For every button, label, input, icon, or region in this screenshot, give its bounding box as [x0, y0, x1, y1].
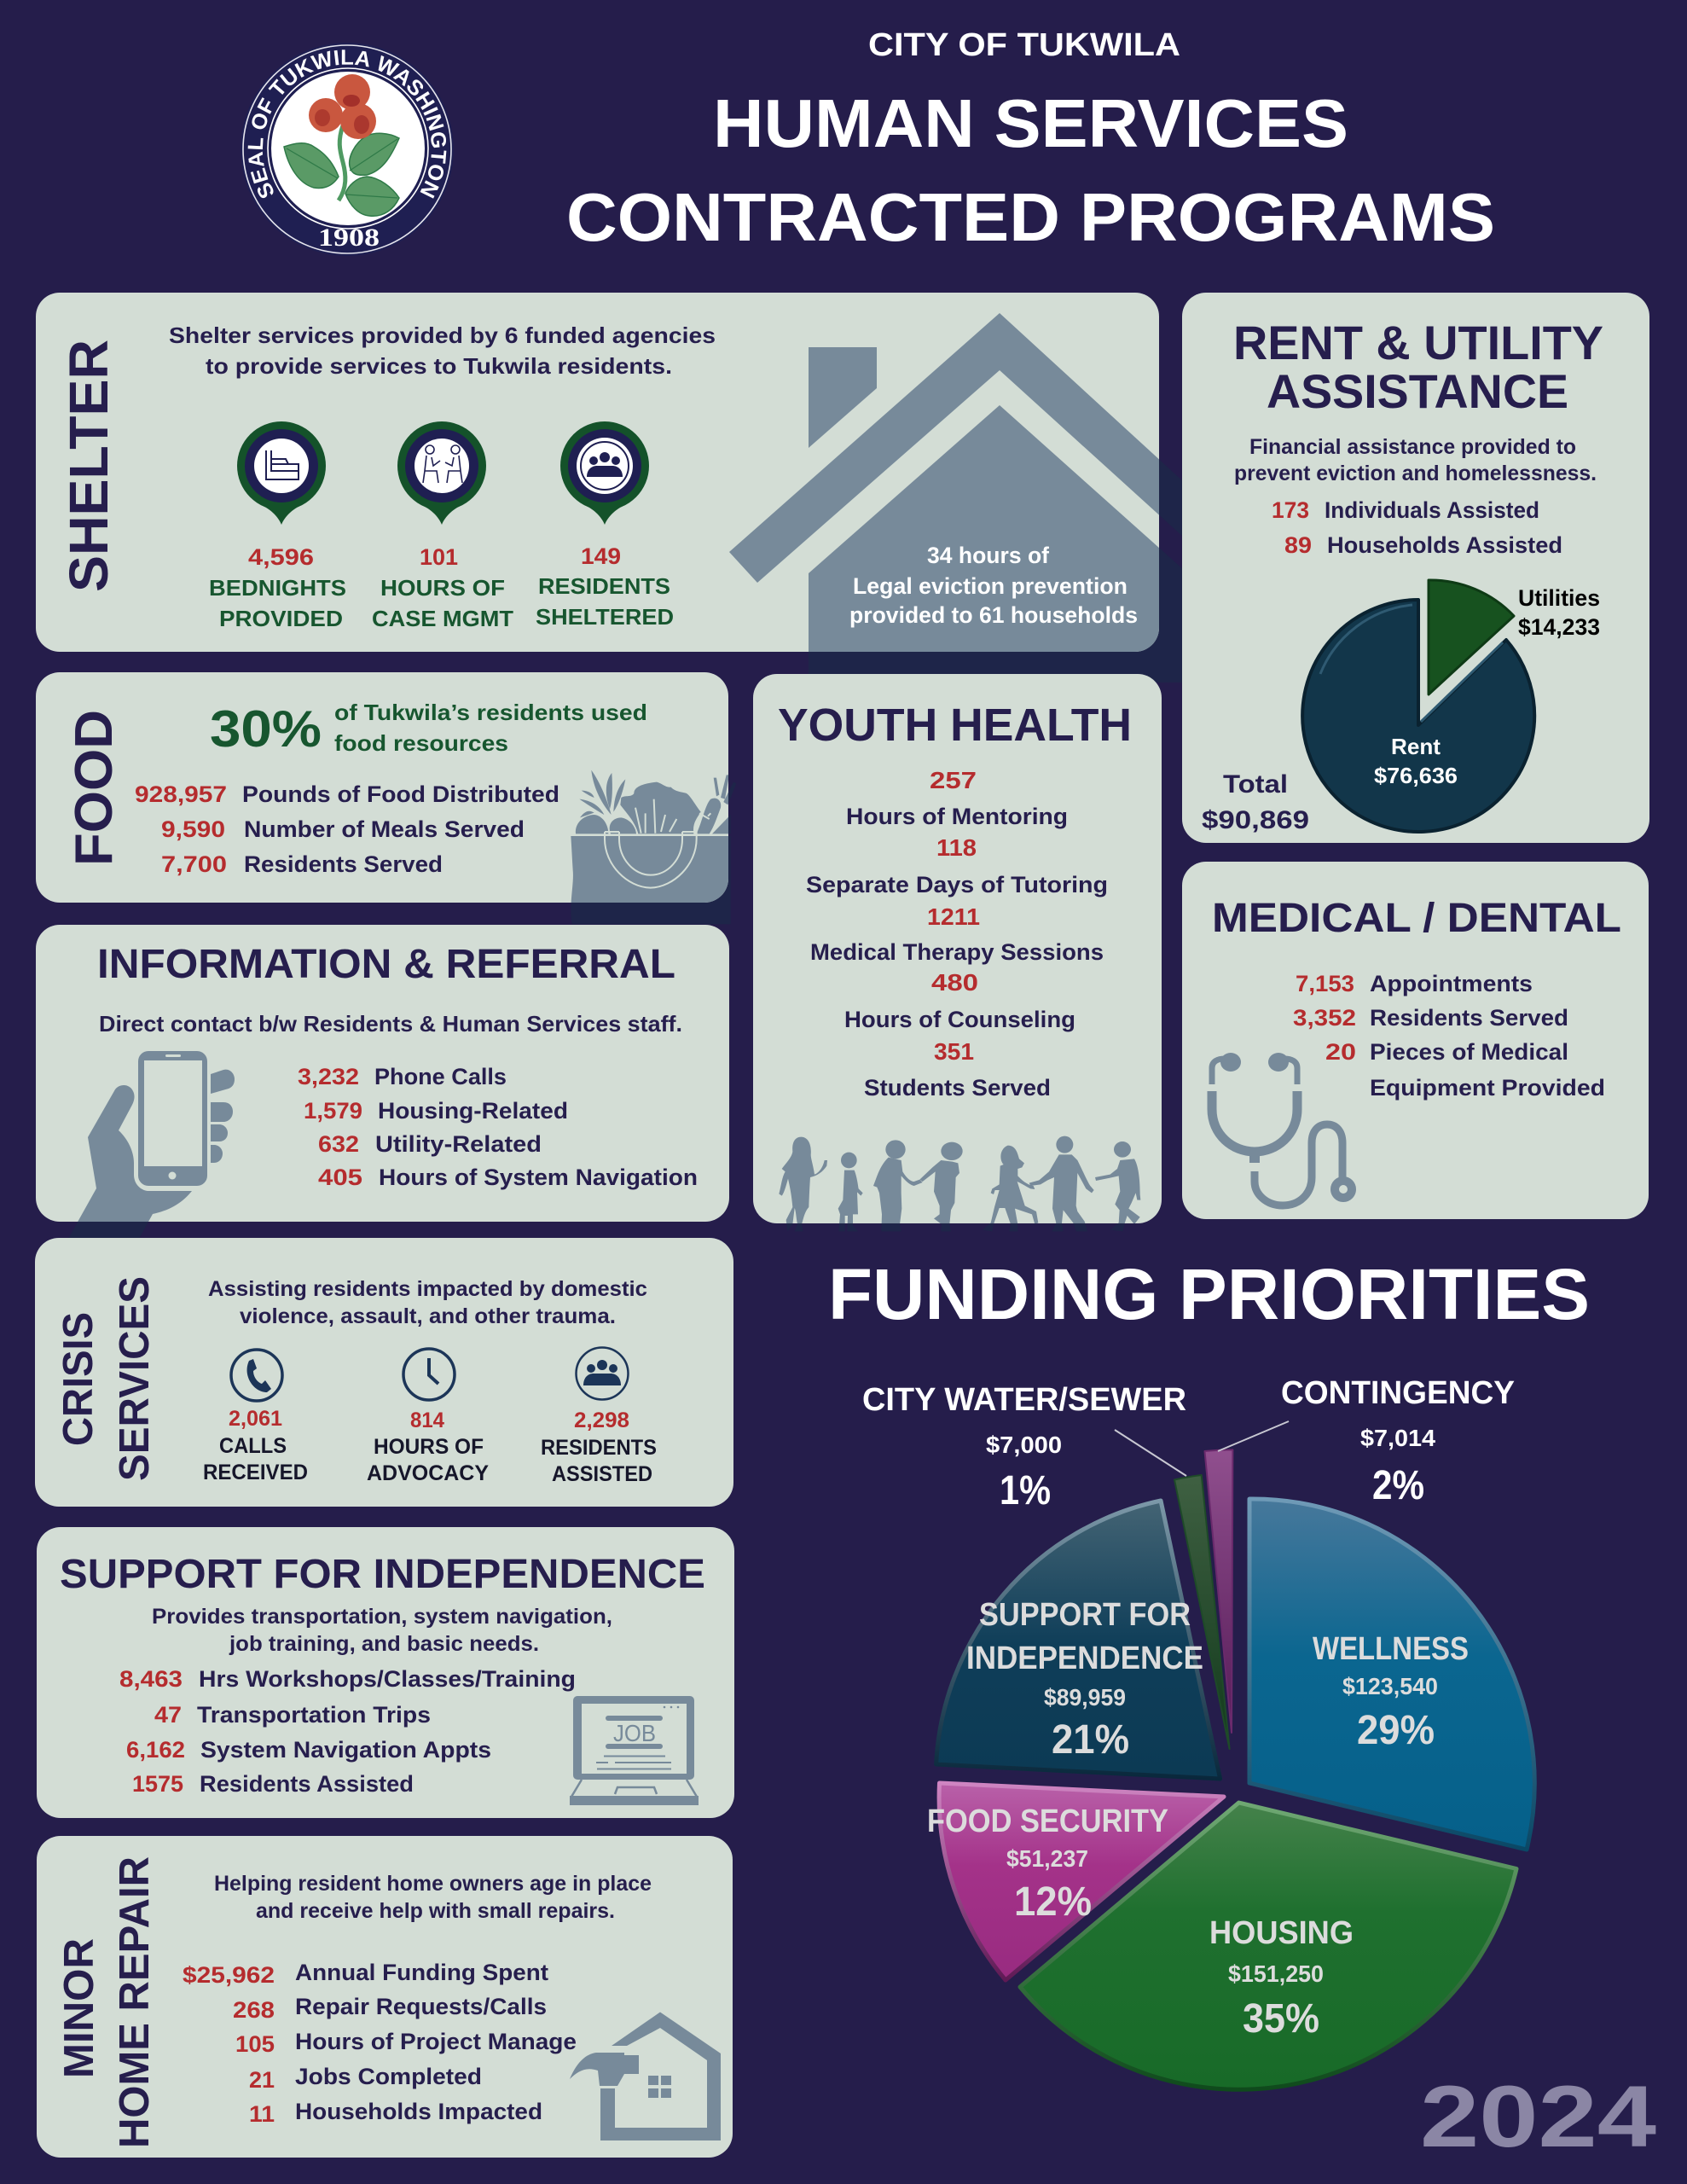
title: CONTRACTED PROGRAMS	[566, 179, 1495, 255]
label: wellness	[1313, 1631, 1469, 1753]
youth stats: 480	[931, 969, 978, 996]
stat: case management	[372, 544, 513, 631]
medical stats	[1293, 971, 1605, 1101]
panel: minor home repair	[37, 1836, 733, 2158]
panel: medical and dental	[1182, 862, 1649, 1219]
icon: laptop job listing: JOB	[613, 1720, 656, 1746]
youth stats: Hours of Counseling	[844, 1007, 1075, 1032]
slice: housing	[1020, 1803, 1516, 2089]
info stats: 3,232	[298, 1064, 359, 1089]
repair stats: $25,962	[183, 1962, 275, 1988]
icon: clock	[403, 1349, 455, 1400]
youth stats: 257	[930, 767, 977, 793]
info stats	[298, 1064, 698, 1190]
label: wellness: WELLNESS	[1313, 1631, 1469, 1667]
icon: hand holding phone	[78, 1051, 235, 1222]
repair stats: 11	[249, 2101, 275, 2127]
heading: rent and utility: ASSISTANCE	[1267, 364, 1568, 418]
stat: calls received	[203, 1407, 308, 1484]
label: food security	[927, 1804, 1168, 1925]
seal of Tukwila: 1908	[318, 224, 380, 252]
food stats: 7,700	[161, 851, 227, 877]
label: food security: 12%	[1014, 1879, 1092, 1925]
support stats	[119, 1666, 576, 1797]
stat: case management: 101	[420, 544, 458, 570]
label: food security: $51,237	[1006, 1845, 1088, 1872]
legal eviction note	[849, 543, 1138, 628]
rent description: prevent eviction and homelessness.	[1234, 462, 1597, 485]
icon: phone	[231, 1350, 282, 1401]
label: housing: $151,250	[1228, 1960, 1324, 1987]
repair description	[214, 1872, 652, 1923]
shelter description: to provide services to Tukwila residents.	[206, 353, 672, 379]
crisis description	[208, 1277, 647, 1328]
slice: wellness	[1249, 1499, 1534, 1850]
medical stats: 3,352	[1293, 1005, 1356, 1031]
stat: bednights	[209, 544, 346, 631]
support stats: 47	[154, 1702, 182, 1728]
slice: support for independence	[936, 1501, 1220, 1779]
food stats	[135, 781, 559, 877]
repair stats: Hours of Project Manage	[295, 2029, 577, 2054]
legal eviction note: 34 hours of	[927, 543, 1050, 568]
food stats: Number of Meals Served	[244, 816, 525, 842]
info description: Direct contact b/w Residents & Human Services staff.	[99, 1011, 682, 1037]
label: contingency: 2%	[1372, 1463, 1424, 1508]
support stats: Transportation Trips	[197, 1702, 431, 1728]
youth stats: Separate Days of Tutoring	[806, 872, 1108, 897]
pie chart: rent and utilities	[1202, 580, 1600, 834]
heading: minor home repair	[56, 1856, 158, 2148]
heading: food: FOOD	[65, 710, 124, 866]
legal eviction note: provided to 61 households	[849, 602, 1138, 628]
slice: contingency	[1204, 1449, 1232, 1733]
medical stats: 7,153	[1296, 971, 1354, 996]
stat: calls received: CALLS	[219, 1434, 287, 1458]
youth stats: Students Served	[864, 1075, 1051, 1101]
leader lines	[1115, 1421, 1289, 1476]
label: support for independence: INDEPENDENCE	[966, 1641, 1203, 1676]
crisis description: violence, assault, and other trauma.	[240, 1304, 616, 1328]
youth stats	[806, 767, 1108, 1101]
medical stats: Pieces of Medical	[1370, 1039, 1568, 1065]
seal of Tukwila: SEAL OF TUKWILA WASHINGTON	[247, 49, 447, 199]
medical stats: Appointments	[1370, 971, 1533, 996]
info stats: 405	[318, 1165, 362, 1190]
food headline stat: food resources	[334, 730, 508, 756]
icon: house	[729, 313, 1159, 652]
food headline stat: 30%	[210, 700, 322, 758]
heading: rent and utility	[1233, 316, 1603, 418]
food headline stat	[210, 700, 647, 758]
info stats: Utility-Related	[375, 1131, 542, 1157]
info stats: 632	[318, 1131, 359, 1157]
youth stats: Medical Therapy Sessions	[810, 939, 1104, 965]
slice: city water and sewer	[1174, 1475, 1230, 1749]
stat: hours of advocacy	[367, 1409, 489, 1485]
stat: residents sheltered	[536, 543, 674, 630]
rent stats: 89	[1284, 532, 1312, 558]
medical stats: Residents Served	[1370, 1005, 1568, 1031]
pie chart: rent and utilities: Total	[1223, 770, 1288, 799]
youth stats: Hours of Mentoring	[846, 804, 1068, 829]
repair stats	[183, 1960, 577, 2127]
heading: medical and dental: MEDICAL / DENTAL	[1212, 896, 1621, 941]
crisis description: Assisting residents impacted by domestic	[208, 1277, 647, 1301]
label: city water and sewer: 1%	[1000, 1468, 1051, 1513]
label: support for independence: $89,959	[1044, 1684, 1126, 1711]
support stats: System Navigation Appts	[200, 1737, 491, 1763]
pie chart: funding priorities	[862, 1375, 1534, 2089]
youth stats: 1211	[927, 903, 980, 930]
stat: bednights: 4,596	[248, 544, 314, 570]
support stats: Residents Assisted	[200, 1771, 414, 1797]
panel: shelter	[36, 293, 1184, 682]
youth stats: 118	[936, 834, 977, 861]
info stats: Hours of System Navigation	[379, 1165, 698, 1190]
panel: rent and utility assistance	[1182, 293, 1649, 843]
icon: children silhouettes	[779, 1136, 1140, 1231]
label: wellness: 29%	[1357, 1708, 1435, 1753]
label: wellness: $123,540	[1342, 1673, 1438, 1699]
support stats: 1575	[132, 1771, 183, 1797]
rent description	[1234, 435, 1597, 485]
label: support for independence	[966, 1597, 1203, 1763]
stat: calls received: 2,061	[229, 1407, 282, 1431]
stat: residents assisted	[541, 1409, 657, 1486]
stat: case management: CASE MGMT	[372, 606, 513, 631]
label: contingency: $7,014	[1360, 1425, 1435, 1451]
repair stats: Jobs Completed	[295, 2064, 482, 2089]
stat: residents assisted: 2,298	[574, 1409, 629, 1432]
rent description: Financial assistance provided to	[1249, 435, 1576, 459]
label: support for independence: SUPPORT FOR	[979, 1597, 1191, 1633]
panel: youth health	[753, 674, 1162, 1231]
repair stats: 21	[249, 2067, 275, 2093]
heading: crisis services: SERVICES	[112, 1276, 158, 1481]
icon: laptop job listing	[570, 1696, 699, 1805]
repair stats: 268	[233, 1997, 275, 2023]
icon: residents pin	[560, 421, 649, 525]
pie chart: rent and utilities: $76,636	[1374, 763, 1458, 788]
pie chart: rent and utilities: Utilities	[1518, 585, 1600, 611]
stat: residents assisted: RESIDENTS	[541, 1436, 657, 1460]
food stats: 9,590	[161, 816, 225, 842]
heading: funding priorities: FUNDING PRIORITIES	[828, 1254, 1590, 1334]
slice: food security	[939, 1783, 1224, 1980]
repair description: Helping resident home owners age in place	[214, 1872, 652, 1896]
icon: grocery bag	[571, 770, 728, 903]
stat: residents assisted: ASSISTED	[552, 1462, 652, 1486]
stat: hours of advocacy: 814	[410, 1409, 444, 1432]
info stats: Housing-Related	[378, 1098, 568, 1124]
pie chart: rent and utilities: $90,869	[1202, 806, 1309, 834]
heading: shelter: SHELTER	[58, 340, 119, 592]
label: city water and sewer: $7,000	[986, 1432, 1062, 1458]
info stats: 1,579	[304, 1098, 362, 1124]
icon: case management pin	[397, 421, 486, 525]
repair stats: Repair Requests/Calls	[295, 1994, 547, 2019]
info stats: Phone Calls	[374, 1064, 507, 1089]
repair stats: 105	[235, 2031, 275, 2057]
panel: food	[36, 672, 736, 924]
pie chart: rent and utilities: $14,233	[1518, 614, 1600, 640]
shelter description	[169, 322, 716, 379]
label: food security: FOOD SECURITY	[927, 1804, 1168, 1839]
label: support for independence: 21%	[1052, 1717, 1129, 1763]
stat: calls received: RECEIVED	[203, 1461, 308, 1484]
repair stats: Households Impacted	[295, 2099, 542, 2124]
panel: information and referral	[36, 925, 729, 1239]
icon: people	[577, 1348, 628, 1399]
food stats: Residents Served	[244, 851, 443, 877]
heading: information and referral: INFORMATION & REFERRAL	[97, 942, 675, 987]
panel: support for independence	[37, 1527, 734, 1818]
support description: Provides transportation, system navigation,	[152, 1605, 612, 1629]
stat: case management: HOURS OF	[380, 575, 505, 601]
heading: crisis services: CRISIS	[55, 1312, 101, 1446]
icon: house and hammer	[570, 2012, 721, 2140]
label: contingency: CONTINGENCY	[1281, 1375, 1515, 1411]
medical stats: Equipment Provided	[1370, 1075, 1605, 1101]
legal eviction note: Legal eviction prevention	[853, 573, 1128, 599]
heading: minor home repair: MINOR	[56, 1938, 102, 2078]
medical stats: 20	[1325, 1039, 1356, 1065]
heading: rent and utility: RENT & UTILITY	[1233, 316, 1603, 369]
stat: residents sheltered: RESIDENTS	[538, 573, 670, 599]
stat: bednights: BEDNIGHTS	[209, 575, 346, 601]
panel: crisis services	[35, 1238, 733, 1507]
heading: youth health: YOUTH HEALTH	[778, 700, 1132, 751]
heading: minor home repair: HOME REPAIR	[112, 1856, 158, 2148]
repair description: and receive help with small repairs.	[256, 1899, 615, 1923]
title: CITY OF TUKWILA	[868, 27, 1180, 63]
stat: hours of advocacy: ADVOCACY	[367, 1461, 489, 1485]
support description	[152, 1605, 612, 1656]
heading: support for independence: SUPPORT FOR INDEPENDENCE	[60, 1552, 705, 1597]
youth stats: 351	[934, 1038, 974, 1065]
support description: job training, and basic needs.	[229, 1632, 539, 1656]
food stats: Pounds of Food Distributed	[242, 781, 559, 807]
label: housing: 35%	[1243, 1996, 1319, 2042]
food stats: 928,957	[135, 781, 227, 807]
shelter description: Shelter services provided by 6 funded agencies	[169, 322, 716, 348]
heading: crisis services	[55, 1276, 158, 1481]
label: contingency	[1281, 1375, 1515, 1508]
label: city water and sewer	[862, 1382, 1186, 1513]
support stats: Hrs Workshops/Classes/Training	[199, 1666, 576, 1692]
label: city water and sewer: CITY WATER/SEWER	[862, 1382, 1186, 1418]
label: housing: HOUSING	[1209, 1915, 1354, 1951]
rent stats: Households Assisted	[1327, 532, 1562, 558]
repair stats: Annual Funding Spent	[295, 1960, 548, 1985]
food headline stat: of Tukwila’s residents used	[334, 700, 647, 725]
stat: bednights: PROVIDED	[219, 606, 343, 631]
rent stats: Individuals Assisted	[1325, 497, 1539, 523]
title	[566, 27, 1495, 255]
icon: bed pin	[237, 421, 326, 525]
icon: stethoscope	[1212, 1053, 1352, 1205]
stat: residents sheltered: SHELTERED	[536, 604, 674, 630]
stat: hours of advocacy: HOURS OF	[374, 1435, 484, 1459]
pie chart: rent and utilities: Rent	[1391, 734, 1441, 759]
label: housing	[1209, 1915, 1354, 2042]
rent stats	[1272, 497, 1562, 558]
rent stats: 173	[1272, 497, 1309, 523]
stat: residents sheltered: 149	[581, 543, 621, 569]
support stats: 6,162	[126, 1737, 185, 1763]
year label: 2024	[1420, 2068, 1656, 2165]
title: HUMAN SERVICES	[713, 85, 1348, 161]
support stats: 8,463	[119, 1666, 183, 1692]
